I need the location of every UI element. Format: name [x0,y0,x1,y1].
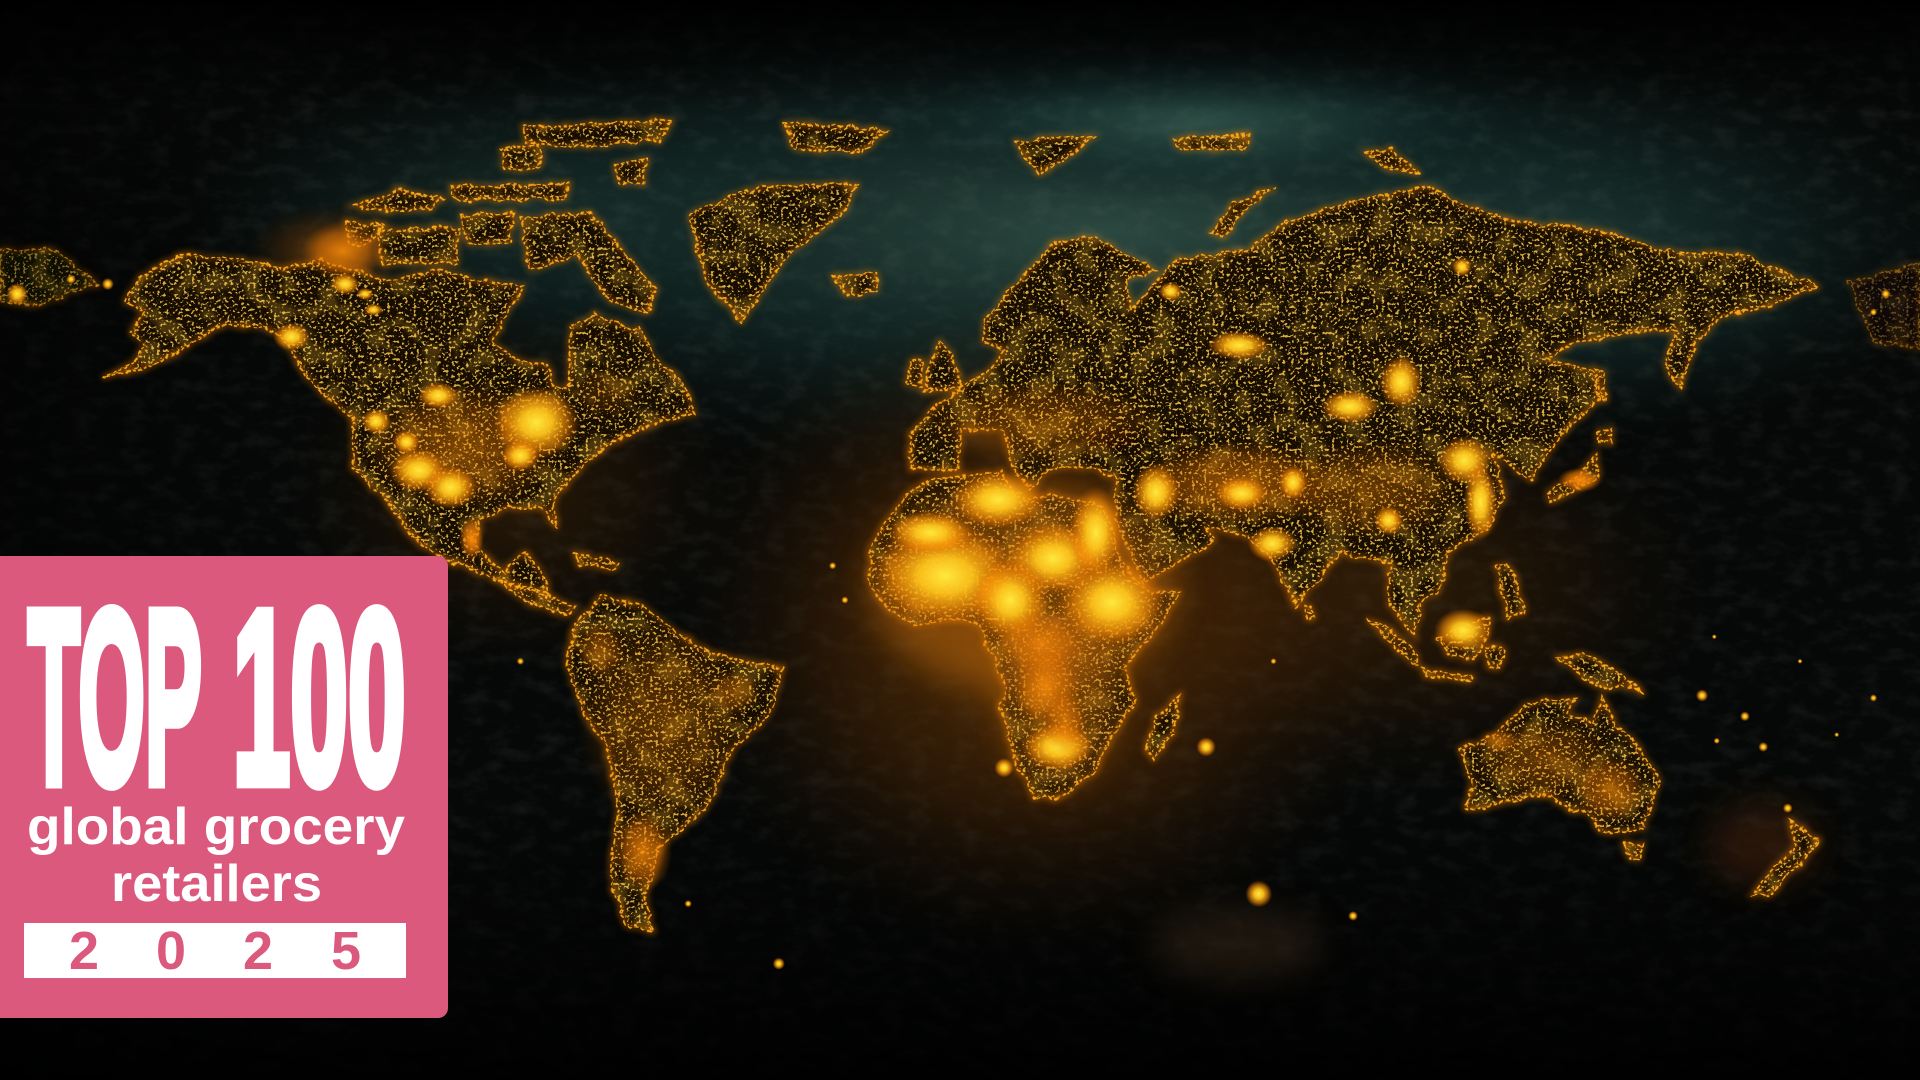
Iceland [833,272,877,296]
Greenland north [784,122,888,152]
subtitle line: global grocery: global grocery [27,798,405,856]
Sumatra [1368,618,1419,666]
year: 2025: 2 [69,921,99,981]
Eurasia [911,186,1817,637]
headline: 100: 100 [233,561,406,836]
Greenland main [688,184,857,321]
Sakhalin [1594,367,1607,402]
subtitle line: retailers: retailers [111,855,322,913]
Novaya Zemlya [1211,186,1275,236]
North America [100,255,696,596]
year: 2025: 5 [331,921,361,981]
city light speckle [0,120,1920,931]
Sri Lanka [1305,605,1315,618]
Hokkaido [1599,429,1611,443]
glowing coastlines [0,120,1920,931]
Victoria island [460,213,514,245]
mottled light clusters [0,120,1920,931]
year: 2025: 2 [243,921,273,981]
Australia hotspots [1472,718,1647,824]
amber glow around Africa, Asia and the Americas [245,202,1818,980]
Borneo [1438,617,1491,660]
Japan [1548,453,1599,502]
Tasmania [1624,844,1643,860]
New Guinea [1558,654,1641,692]
dark inland seas [1058,282,1190,462]
Franz Josef Land [1174,135,1249,149]
Europe glow [918,378,1163,467]
Caribbean [576,553,618,571]
Queen Elizabeth islands [520,120,671,147]
bright population hotspots [6,222,1891,970]
Severnaya Zemlya [1364,149,1420,174]
New Zealand [1753,820,1818,896]
continents [0,120,1920,931]
North America hotspots [273,222,643,561]
island lights [6,274,1891,970]
Ireland [905,360,923,387]
Madagascar [1146,696,1180,759]
Africa [868,471,1178,798]
South America hotspots [576,618,762,893]
Baffin island [520,213,655,313]
Bering edge of Asia [1849,263,1920,349]
Sulawesi [1487,647,1504,669]
badge panel [0,556,448,1018]
United Kingdom [923,340,962,392]
Far east Russia at the left edge [0,249,98,306]
Banks island [345,223,386,247]
Africa hotspots [869,470,1176,784]
year box [24,923,406,978]
Arctic islands west [353,190,443,211]
Asia hotspots [1131,257,1602,653]
headline: TOP: TOP [28,561,202,836]
Svalbard [1015,137,1095,174]
Arctic small island [615,159,647,184]
Arctic islands centre [451,184,569,201]
South America [566,596,784,931]
Arctic island group north [500,144,541,169]
year: 2025: 0 [156,921,186,981]
Java [1422,669,1472,681]
Central America [500,580,576,615]
year: 2025 [69,921,361,981]
Mackenzie delta [377,228,459,264]
Philippines [1496,563,1526,620]
Australia [1458,697,1660,834]
